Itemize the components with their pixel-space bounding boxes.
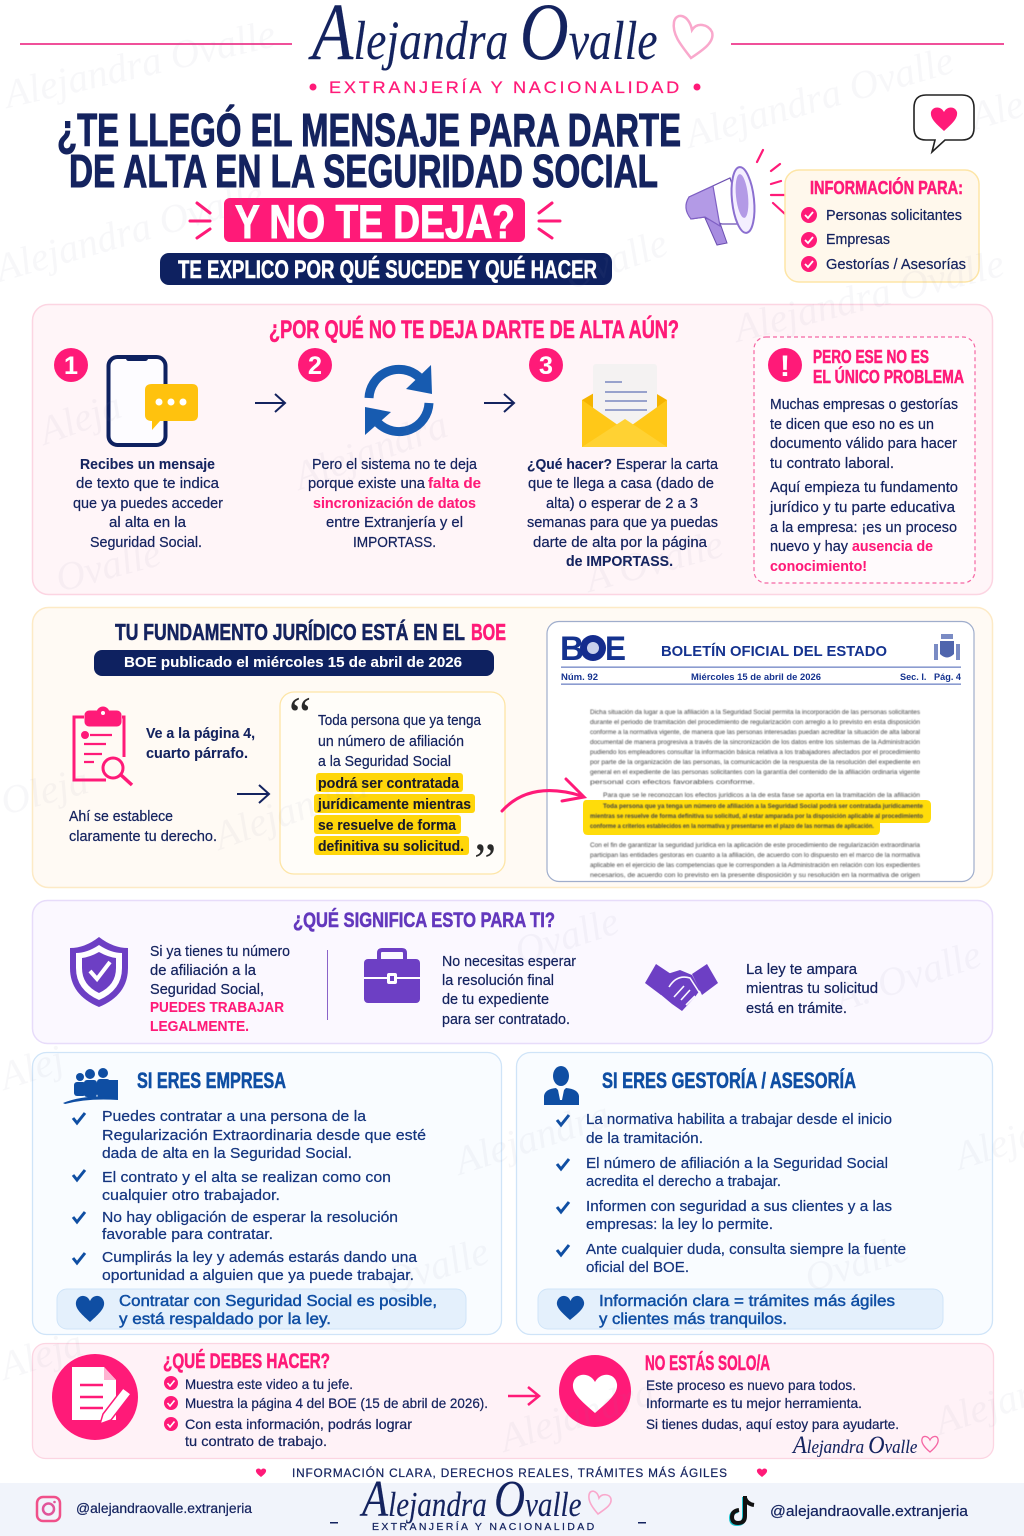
text: la ley te ampara — [746, 962, 878, 1017]
BOE logo: B — [560, 630, 584, 668]
list: empresa: oportunidad a alguien que ya puede trabajar. — [102, 1267, 414, 1284]
icon: instagram — [37, 1497, 60, 1521]
text: puedes trabajar: de afiliación a la — [150, 963, 257, 979]
icon: advisor — [544, 1066, 579, 1105]
BOE logo — [560, 630, 626, 668]
text: step 3: de IMPORTASS. — [566, 554, 673, 570]
text: no necesitas: para ser contratado. — [442, 1012, 570, 1028]
watermark signatures: Alejandra — [285, 401, 453, 499]
BOE document: Núm. 92 — [561, 672, 598, 683]
watermark signatures: Ovalle — [799, 1225, 914, 1301]
watermark signatures: Alejandra Ovalle — [726, 240, 1009, 351]
text: step 2: sincronización de datos — [313, 496, 476, 512]
document highlight — [583, 800, 931, 835]
main title — [57, 104, 681, 197]
watermark signatures: Alejandra Ovalle — [0, 11, 280, 117]
panel: qué significa — [32, 900, 992, 1044]
check: empresas — [801, 232, 817, 248]
tagline: INFORMACIÓN CLARA, DERECHOS REALES, TRÁMITES MÁS ÁGILES — [292, 1466, 728, 1480]
heading: ¿QUÉ DEBES HACER? — [163, 1350, 330, 1373]
pink curved arrow — [502, 779, 584, 811]
list: empresa: dada de alta en la Seguridad Social. — [102, 1145, 352, 1162]
text: puedes trabajar: Seguridad Social, — [150, 982, 264, 998]
BOE document: Sec. I. Pág. 4 — [900, 672, 962, 683]
quote box: definitiva su solicitud. — [318, 839, 464, 855]
text: puedes trabajar: PUEDES TRABAJAR — [150, 1000, 284, 1016]
callout: pero ese no es: Aquí empieza tu fundamento — [770, 480, 958, 496]
list: empresa: cualquier otro trabajador. — [102, 1187, 280, 1204]
heading: BOE — [471, 619, 506, 645]
text: step 2: Pero el sistema no te deja — [312, 457, 478, 473]
date pill: BOE publicado el miércoles 15 de abril de 2026 — [124, 655, 462, 671]
step 2 badge — [298, 348, 332, 382]
list: empresa: Cumplirás la ley y además estarás dando una — [102, 1249, 418, 1266]
subtitle pill — [160, 253, 612, 285]
text: step 2: IMPORTASS. — [353, 535, 436, 551]
document body text continued: participan las entidades gestoras en cuanto a la afiliación, de acuerdo con lo dispuesto en el marco de la normativa — [590, 852, 920, 859]
icon: speech bubble heart — [914, 95, 974, 152]
step 2 badge: 2 — [308, 352, 322, 380]
watermark signatures: Alejandra Ovalle — [677, 37, 958, 157]
list: empresa: Regularización Extraordinaria desde que esté — [102, 1127, 426, 1144]
heading: TU FUNDAMENTO JURÍDICO ESTÁ EN EL — [115, 618, 465, 645]
document highlight: conforme a criterios establecidos en la normativa y presentarse en el plazo de las normas de aplicación. — [590, 823, 874, 830]
callout: contratar: y está respaldado por la ley. — [119, 1311, 331, 1328]
heading: ¿POR QUÉ NO TE DEJA DARTE DE ALTA AÚN? — [269, 314, 679, 344]
quote box: podrá ser contratada — [318, 776, 460, 792]
text: puedes trabajar: Si ya tienes tu número — [150, 944, 290, 960]
BOE document: BOLETÍN OFICIAL DEL ESTADO — [661, 643, 887, 660]
signature: Alejandra Ovalle — [791, 1432, 917, 1459]
footer logo: EXTRANJERÍA Y NACIONALIDAD — [372, 1520, 596, 1533]
list: gestoría: Ante cualquier duda, consulta siempre la fuente — [586, 1241, 906, 1258]
text: no estás solo: Si tienes dudas, aquí estoy para ayudarte. — [646, 1416, 899, 1432]
icon: shield — [70, 937, 128, 1007]
heading: ¿QUÉ SIGNIFICA ESTO PARA TI? — [293, 909, 555, 932]
icon: envelope with letter — [582, 364, 667, 447]
list: empresa: Puedes contratar a una persona de la — [102, 1108, 367, 1125]
text: no necesitas: la resolución final — [442, 973, 554, 989]
icon: heart circle — [559, 1355, 631, 1427]
subtitle: EXTRANJERÍA Y NACIONALIDAD — [329, 78, 682, 97]
text: step 1: Seguridad Social. — [90, 535, 202, 551]
list: qué hacer: tu contrato de trabajo. — [185, 1433, 327, 1449]
panel: información para: INFORMACIÓN PARA: — [810, 177, 963, 198]
watermark signatures: Aleja — [30, 382, 127, 454]
panel: información para — [785, 170, 979, 282]
document body text: pudiendo los empleadores consultar la información básica relativa a los trabajadores afectados por el procedimiento — [590, 749, 920, 756]
watermark signatures: Alejandra — [491, 1368, 660, 1461]
quote box: a la Seguridad Social — [318, 754, 451, 770]
main title: DE ALTA EN LA SEGURIDAD SOCIAL — [69, 145, 658, 197]
callout: pero ese no es — [754, 337, 975, 583]
subtitle pill: TE EXPLICO POR QUÉ SUCEDE Y QUÉ HACER — [178, 255, 597, 284]
list: empresa: No hay obligación de esperar la resolución — [102, 1209, 398, 1226]
document body text: documental de manera progresiva a través de la sincronización de los datos entre los sistemas de la Administración — [590, 739, 920, 746]
header logo — [20, 0, 1004, 97]
text: step 3: Esperar la carta — [616, 457, 719, 473]
text: derecho: claramente tu derecho. — [69, 829, 217, 845]
document body text — [590, 709, 921, 799]
icon: briefcase — [364, 950, 420, 1003]
footer logo: Alejandra Ovalle — [359, 1471, 582, 1528]
handle: instagram: @alejandraovalle.extranjeria — [76, 1501, 252, 1516]
icon: clipboard search — [74, 708, 132, 785]
list: gestoría: de la tramitación. — [586, 1130, 703, 1147]
callout: pero ese no es: conocimiento! — [770, 559, 867, 575]
text: step 3 — [527, 457, 719, 570]
callout: información clara: y clientes más tranquilos. — [599, 1311, 787, 1328]
text: no estás solo — [646, 1377, 899, 1432]
text: no necesitas: de tu expediente — [442, 992, 549, 1008]
watermark signatures: Ovalle — [51, 530, 165, 601]
quote box: “ — [289, 686, 311, 742]
text: página: cuarto párrafo. — [146, 746, 248, 762]
list: empresa — [73, 1108, 426, 1284]
document body text: general en el expediente de las personas solicitantes con la garantía del contenido de la afiliación ordinaria vigente — [590, 769, 920, 776]
BOE document — [547, 622, 974, 882]
text: step 1: al alta en la — [109, 515, 187, 531]
callout: información clara — [538, 1289, 943, 1329]
callout: pero ese no es: jurídico y tu parte educativa — [769, 500, 956, 516]
main title: ¿TE LLEGÓ EL MENSAJE PARA DARTE — [57, 104, 681, 156]
list: qué hacer: Muestra la página 4 del BOE (15 de abril de 2026). — [185, 1395, 488, 1411]
text: no necesitas — [442, 954, 576, 1028]
step 3 badge: 3 — [539, 352, 553, 380]
footer logo — [330, 1471, 646, 1533]
callout: pero ese no es: PERO ESE NO ES — [813, 347, 929, 367]
callout: pero ese no es: documento válido para hacer — [770, 436, 957, 452]
icon: tiktok — [731, 1496, 754, 1524]
text: step 2: entre Extranjería y el — [326, 515, 463, 531]
panel: información para: Empresas — [826, 232, 890, 248]
callout: pero ese no es: ! — [780, 350, 790, 383]
text: step 3: alta) o esperar de 2 a 3 — [546, 496, 698, 512]
heading: SI ERES GESTORÍA / ASESORÍA — [602, 1068, 856, 1093]
list: qué hacer: Con esta información, podrás lograr — [185, 1416, 412, 1432]
step 1 badge — [54, 348, 88, 382]
list: gestoría — [557, 1111, 906, 1276]
quote box: se resuelve de forma — [318, 818, 457, 834]
quote box — [280, 686, 505, 888]
step 1 badge: 1 — [64, 352, 78, 380]
quote box: jurídicamente mientras — [317, 797, 471, 813]
list: gestoría: acredita el derecho a trabajar. — [586, 1173, 781, 1190]
callout: pero ese no es: EL ÚNICO PROBLEMA — [813, 366, 964, 387]
arrow 1 — [255, 394, 285, 412]
text: la ley te ampara: está en trámite. — [746, 1001, 847, 1017]
text: step 3: darte de alta por la página — [533, 535, 708, 551]
document body text continued: necesarios, de acuerdo con lo previsto en la presente disposición y su resolución en la normativa de origen — [590, 872, 920, 879]
text: step 2: porque existe una — [308, 476, 426, 492]
text: step 2 — [308, 457, 481, 551]
arrow to quote — [237, 785, 269, 803]
watermark signatures: Alejandra — [446, 1091, 615, 1184]
footer band — [0, 1471, 1024, 1536]
text: step 3: que te llega a casa (dado de — [528, 476, 714, 492]
icon: megaphone — [686, 150, 785, 245]
callout: pero ese no es: tu contrato laboral. — [770, 456, 894, 472]
panel: qué debes hacer — [32, 1344, 994, 1459]
panel: por qué no te deja — [32, 304, 992, 594]
document body text continued: aplicable en el ejercicio de las competencias que le corresponden a la Administración en relación con los expedientes — [590, 862, 921, 869]
BOE document: Miércoles 15 de abril de 2026 — [691, 672, 821, 683]
text: step 1: de texto que te indica — [76, 476, 220, 492]
callout: información clara: Información clara = trámites más ágiles — [599, 1293, 895, 1310]
text: step 1: que ya puedes acceder — [73, 496, 223, 512]
text: derecho — [69, 809, 217, 845]
list: gestoría: La normativa habilita a trabajar desde el inicio — [586, 1111, 892, 1128]
document body text: Dicha situación da lugar a que la afiliación a la Seguridad Social permita la incorporación de las personas solicitantes — [590, 709, 921, 716]
list: gestoría: El número de afiliación a la Seguridad Social — [586, 1155, 888, 1172]
panel: información para: Personas solicitantes — [826, 208, 962, 224]
callout: pero ese no es: Muchas empresas o gestorías — [770, 397, 958, 413]
text: no estás solo: Informarte es tu mejor herramienta. — [646, 1395, 862, 1411]
panel: información para: Gestorías / Asesorías — [826, 257, 966, 273]
text: la ley te ampara: La ley te ampara — [746, 962, 858, 978]
text: step 2: falta de — [428, 476, 481, 492]
list: qué hacer: Muestra este video a tu jefe. — [185, 1376, 353, 1392]
callout: pero ese no es: a la empresa: ¡es un proceso — [770, 520, 957, 536]
arrow pink — [508, 1387, 539, 1405]
quote box: un número de afiliación — [318, 734, 464, 750]
list: empresa: El contrato y el alta se realizan como con — [102, 1169, 391, 1186]
quote box: ” — [474, 832, 496, 888]
panel: si eres empresa — [32, 1052, 502, 1334]
text: página — [146, 726, 255, 762]
list: gestoría: empresas: la ley lo permite. — [586, 1216, 773, 1233]
icon: people — [63, 1068, 118, 1104]
document body text: conforme a la normativa vigente, de manera que las personas interesadas puedan acreditar la situación de alta laboral — [590, 729, 921, 736]
document body text: por parte de la organización de las personas, la comunicación de la respuesta de la resolución del expediente en — [590, 759, 920, 766]
watermark signatures: A Ovalle — [578, 521, 728, 601]
document body text: personal con efectos favorables conforme. — [590, 779, 755, 786]
watermark signatures: A. Ovalle — [826, 931, 986, 1021]
callout: contratar: Contratar con Seguridad Social es posible, — [119, 1293, 437, 1310]
callout: pero ese no es: ausencia de — [852, 539, 933, 555]
list: gestoría: Informen con seguridad a sus clientes y a las — [586, 1198, 892, 1215]
callout: pero ese no es: nuevo y hay — [770, 539, 849, 555]
icon: coat of arms — [934, 634, 960, 660]
watermark signatures: Ovalle — [379, 1228, 494, 1304]
heading: NO ESTÁS SOLO/A — [645, 1352, 770, 1375]
text: derecho: Ahí se establece — [69, 809, 173, 825]
list: qué hacer — [164, 1376, 488, 1449]
icon: sync — [365, 365, 432, 435]
document body text continued — [590, 842, 921, 879]
icon: handshake — [645, 964, 718, 1011]
document body text: Para que se le reconozcan los efectos jurídicos a la de esta fase se aporta en la tramitación de la afiliación — [603, 792, 920, 799]
highlights — [314, 773, 475, 855]
watermark signatures: Ovalle — [558, 220, 673, 298]
pink highlight title: Y NO TE DEJA? — [235, 195, 515, 248]
text: no necesitas: No necesitas esperar — [442, 954, 576, 970]
text: la ley te ampara: mientras tu solicitud — [746, 981, 878, 997]
handle: tiktok: @alejandraovalle.extranjeria — [770, 1504, 969, 1520]
callout: contratar — [57, 1289, 466, 1329]
text: puedes trabajar: LEGALMENTE. — [150, 1019, 249, 1035]
watermark signatures: Ovalle — [509, 898, 624, 974]
check: personas — [801, 207, 817, 223]
text: step 3: ¿Qué hacer? — [527, 457, 612, 473]
check: gestorías — [801, 256, 817, 272]
text: no estás solo: Este proceso es nuevo para todos. — [646, 1377, 856, 1393]
arrow 2 — [484, 394, 514, 412]
document highlight: mientras se resuelve de forma definitiva su solicitud, al estar amparada por la disposición aplicable al procedimiento — [590, 813, 923, 820]
text: step 3: semanas para que ya puedas — [527, 515, 718, 531]
quote box: Toda persona que ya tenga — [318, 713, 482, 729]
heading: SI ERES EMPRESA — [137, 1068, 286, 1093]
date pill — [94, 650, 494, 676]
text: step 1: Recibes un mensaje — [80, 457, 215, 473]
text: step 1 — [73, 457, 223, 551]
text: puedes trabajar — [150, 944, 290, 1035]
panel: fundamento jurídico — [32, 608, 992, 888]
icon: phone with chat — [108, 356, 198, 445]
list: empresa: favorable para contratar. — [102, 1226, 273, 1243]
callout: pero ese no es: te dicen que eso no es un — [770, 417, 934, 433]
panel: si eres gestoría — [516, 1052, 992, 1334]
document highlight: Toda persona que ya tenga un número de afiliación a la Seguridad Social podrá ser contratada jurídicamente — [603, 803, 923, 810]
icon: heart outline — [674, 16, 712, 58]
icon: document circle — [52, 1354, 138, 1440]
BOE logo: E — [605, 630, 626, 668]
text: página: Ve a la página 4, — [146, 726, 255, 742]
document body text: durante el periodo de tramitación del procedimiento de regularización con arreglo a lo previsto en esta disposición — [590, 719, 920, 726]
step 3 badge — [529, 348, 563, 382]
list: gestoría: oficial del BOE. — [586, 1259, 689, 1276]
watermark signatures: Alejandra — [205, 761, 373, 859]
document body text continued: Con el fin de garantizar la seguridad jurídica en la aplicación de este procedimiento de regularización extraordinaria — [590, 842, 920, 849]
